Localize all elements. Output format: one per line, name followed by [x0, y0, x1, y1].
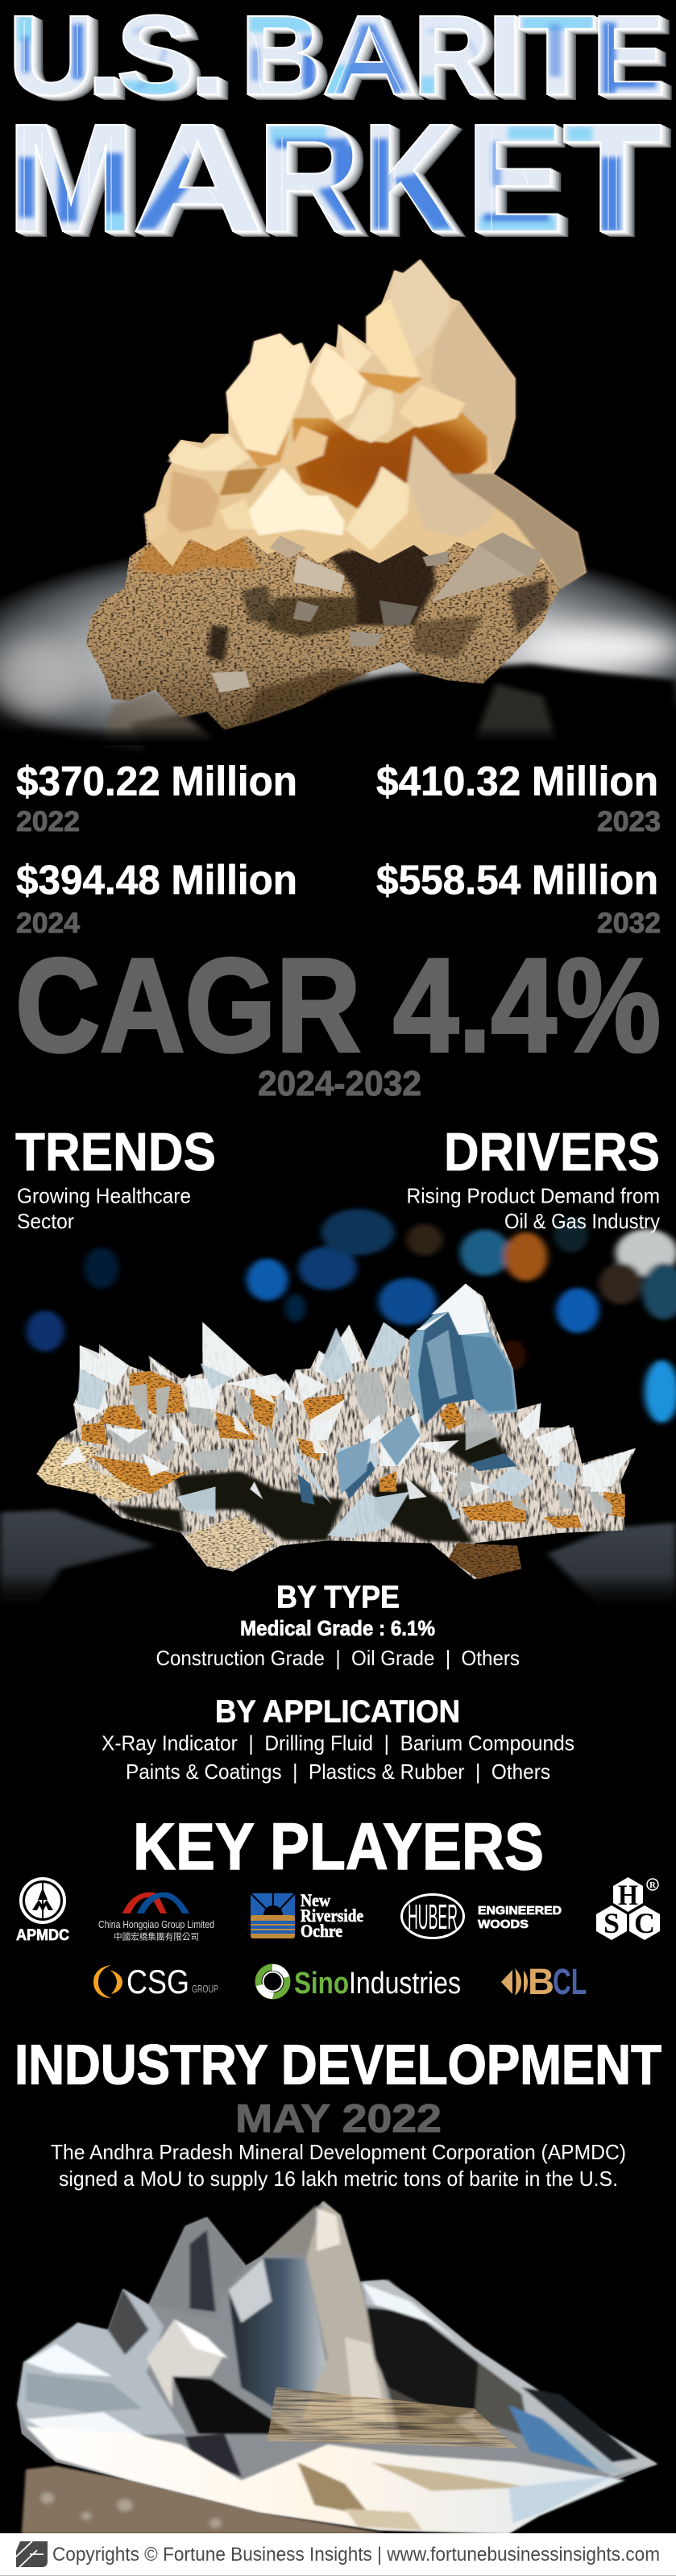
logo: Sino Industries: Industries [349, 1967, 461, 2001]
logo: HSC hexagons [596, 1877, 660, 1940]
logo: CSG Group [93, 1963, 218, 2001]
logo: HSC hexagons: H [618, 1879, 638, 1911]
logo: APMDC: APMDC [16, 1927, 69, 1944]
logo: CSG Group: GROUP [192, 1983, 218, 1995]
stage fade [0, 725, 676, 758]
right body [362, 2279, 657, 2477]
text: applications line 1: X-Ray Indicator | Drilling Fluid | Barium Compounds [102, 1731, 574, 1755]
logo: New Riverside Ochre: Riverside [301, 1905, 363, 1926]
logo: Sino Industries [256, 1964, 461, 2001]
bokeh lights [27, 1209, 676, 1423]
logo: Huber Engineered Woods: ENGINEERED [478, 1904, 562, 1917]
logo: BCL: B [528, 1961, 554, 2002]
icon: Fortune Business Insights logo [16, 2541, 48, 2567]
text: driver detail: Oil & Gas Industry [504, 1209, 660, 1233]
logo: HSC hexagons: S [603, 1907, 620, 1939]
footer band [0, 2533, 676, 2576]
logo: China Hongqiao Group: 中國宏橋集團有限公司 [114, 1931, 199, 1942]
illustration: amber barite crystal on lit stage [0, 260, 676, 788]
left prism [229, 2258, 328, 2423]
stat: 2023 market size: $410.32 Million [376, 758, 658, 804]
logo: New Riverside Ochre: Ochre [301, 1921, 342, 1941]
logo: New Riverside Ochre [251, 1890, 363, 1941]
title line 2: T [562, 91, 662, 264]
stat: 2022 market size [16, 758, 297, 837]
heading: trends: TRENDS [15, 1122, 216, 1182]
logo: China Hongqiao Group [98, 1893, 214, 1942]
stat: 2024 market size [16, 857, 297, 939]
text: trend detail: Sector [17, 1209, 74, 1233]
text: development description: signed a MoU to supply 16 lakh metric tons of barite in the U.S. [59, 2167, 618, 2191]
logo: Sino Industries: Sino [294, 1967, 349, 2001]
text: driver detail [406, 1183, 660, 1233]
logo: APMDC [16, 1879, 69, 1944]
text: development date: MAY 2022 [235, 2097, 442, 2141]
stat: 2024 market size: $394.48 Million [16, 857, 297, 903]
needle shards [60, 1322, 636, 1538]
stat: 2032 market size: 2032 [597, 908, 661, 939]
logo: CSG Group: CSG [126, 1963, 189, 2001]
text: development description [51, 2140, 626, 2191]
text: trend detail [17, 1183, 191, 1233]
heading: by type: BY TYPE [276, 1580, 400, 1615]
illustration: clear quartz-like barite crystal [17, 2201, 657, 2534]
CAGR period: 2024-2032 [258, 1065, 421, 1103]
illustration: blue crystal with bokeh [0, 1209, 676, 1613]
stat: 2024 market size: 2024 [16, 908, 81, 939]
logo: China Hongqiao Group: China Hongqiao Group Limited [98, 1918, 214, 1930]
bright base [26, 2426, 625, 2534]
logo: HSC hexagons: R [649, 1880, 657, 1890]
title line 2 [6, 91, 662, 264]
dark hollows [112, 1430, 508, 1544]
stat: 2032 market size: $558.54 Million [376, 857, 658, 903]
text: trend detail: Growing Healthcare [17, 1183, 191, 1207]
stat: 2022 market size: $370.22 Million [16, 758, 297, 804]
title line 2: K [363, 91, 456, 264]
panel: trends [15, 1122, 216, 1233]
logo: BCL: CL [553, 1961, 587, 2002]
crystal cluster base [36, 1283, 636, 1579]
logo: Huber Engineered Woods: WOODS [478, 1917, 529, 1931]
panel: drivers [406, 1122, 660, 1233]
title line 2: R [257, 91, 361, 264]
logo: BCL [501, 1961, 587, 2002]
panel: by type [156, 1580, 520, 1670]
title line 2: A [131, 91, 264, 264]
ground [0, 1510, 156, 1612]
stat: 2022 market size: 2022 [16, 806, 80, 837]
text: applications line 2: Paints & Coatings | Plastics & Rubber | Others [126, 1760, 550, 1784]
dark inner facets [172, 2376, 293, 2433]
stat: 2032 market size [376, 857, 661, 939]
logo: New Riverside Ochre: New [301, 1890, 330, 1910]
text: driver detail: Rising Product Demand from [406, 1183, 660, 1207]
rock shading [134, 535, 547, 727]
logo: HSC hexagons: C [634, 1907, 655, 1939]
stat: 2023 market size: 2023 [597, 806, 661, 837]
title line 1 [7, 0, 666, 118]
crystal cover [147, 260, 587, 588]
text: other grades: Construction Grade | Oil Grade | Others [156, 1646, 520, 1670]
panel: by application [102, 1694, 574, 1784]
text: development description: The Andhra Pradesh Mineral Development Corporation (APMDC) [51, 2140, 626, 2164]
title line 2: E [466, 91, 564, 264]
orange mineral patches [36, 1371, 625, 1579]
stat: 2023 market size [376, 758, 661, 837]
big blue prism [409, 1283, 517, 1425]
text: medical grade share: Medical Grade : 6.1% [240, 1616, 435, 1640]
heading: by application: BY APPLICATION [215, 1694, 460, 1730]
title line 2: M [6, 91, 135, 264]
title: U.S. Barite Market [6, 0, 666, 264]
heading: key players: KEY PLAYERS [133, 1810, 544, 1884]
logo: Huber Engineered Woods: HUBER [408, 1897, 458, 1937]
tan streaks [267, 2387, 517, 2448]
